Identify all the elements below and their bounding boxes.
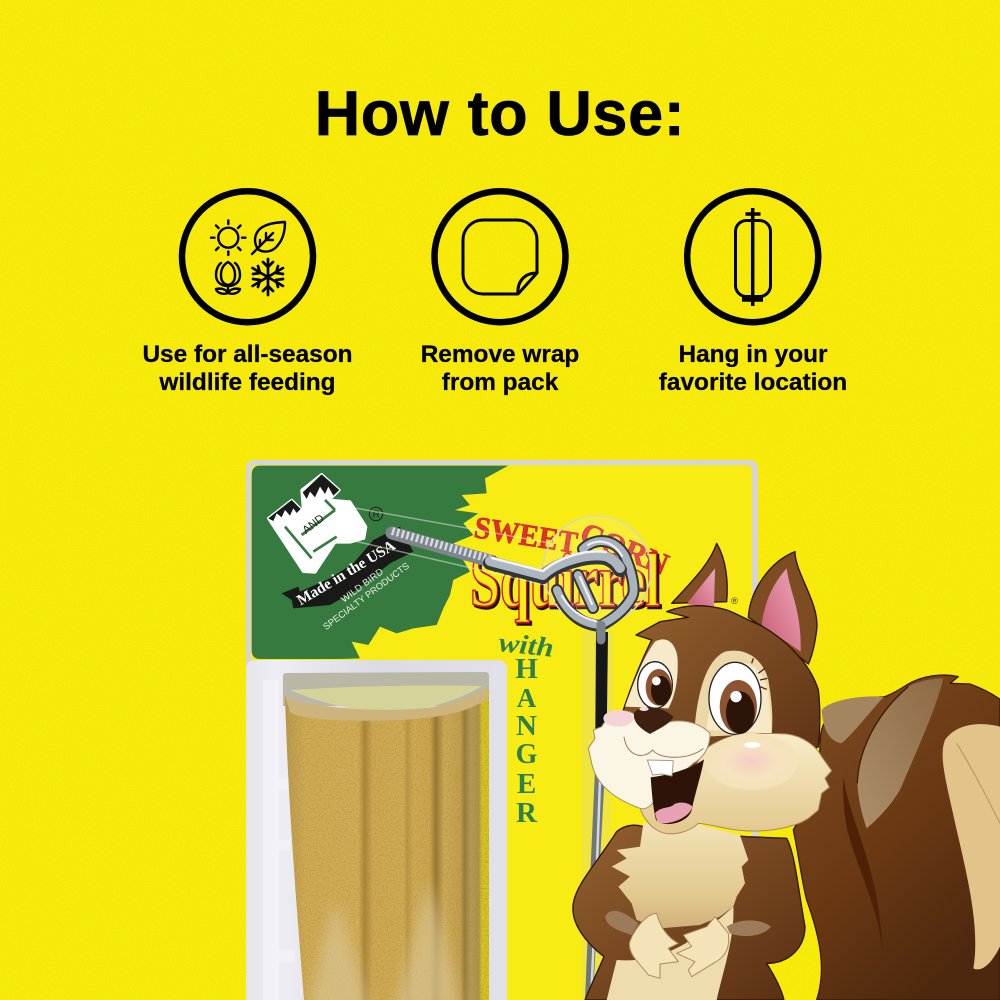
head — [588, 606, 832, 834]
nose — [634, 707, 673, 734]
caption 1: wildlife feeding — [158, 369, 336, 396]
with hanger: with — [497, 627, 555, 663]
step 3: hang — [659, 191, 847, 396]
with hanger: E — [517, 768, 536, 800]
body and arms — [573, 825, 805, 1000]
chest fur — [612, 823, 748, 928]
with hanger: A — [517, 683, 537, 713]
tail — [793, 675, 1000, 1000]
hands — [629, 913, 729, 978]
hanger rod and clear tube — [582, 631, 614, 1000]
wild bird tagline: WILD BIRD — [339, 566, 386, 605]
caption 2: Remove wrap — [421, 341, 579, 368]
green label burst — [252, 466, 508, 659]
mouth — [624, 737, 704, 824]
with hanger: H — [515, 653, 538, 685]
tail highlights — [822, 678, 1000, 969]
registered mark: ® — [731, 596, 738, 606]
suction cup — [543, 516, 651, 624]
corn suet cylinder — [283, 672, 489, 1000]
package backing card — [246, 460, 758, 1000]
squirrel mascot — [573, 543, 1000, 1000]
caption 1: Use for all-season — [142, 341, 353, 368]
icon: hanging feeder — [687, 191, 818, 322]
icon: seasons — [182, 191, 313, 322]
icon: peel sticker — [434, 191, 566, 322]
product name: Squirrel — [472, 541, 662, 625]
tagline: SPECIALTY PRODUCTS — [321, 561, 411, 632]
brand logo: AND — [300, 513, 327, 537]
caption 2: from pack — [442, 369, 559, 396]
clear blister tray — [246, 660, 507, 1000]
muzzle — [588, 711, 710, 809]
step 1: all-season use — [142, 191, 353, 396]
product name: Squirrel — [470, 539, 660, 623]
product name — [470, 509, 674, 625]
made in the USA banner — [282, 527, 413, 609]
with hanger: N — [516, 710, 537, 742]
loop — [490, 541, 634, 640]
with hanger: R — [516, 797, 538, 829]
ears — [672, 543, 817, 664]
clear sleeve over logo — [350, 508, 550, 585]
threaded screw — [392, 531, 490, 561]
metal hook with suction cup — [350, 508, 651, 640]
caption 3: Hang in your — [678, 341, 828, 368]
cheek — [640, 733, 832, 834]
eye patches — [625, 639, 678, 708]
left eye — [638, 662, 672, 708]
brand logo: R — [373, 510, 380, 521]
brand logo — [268, 474, 383, 572]
title: How to Use: — [315, 79, 685, 149]
step 2: remove wrap — [421, 191, 579, 396]
with hanger — [497, 627, 555, 829]
caption 3: favorite location — [659, 369, 847, 396]
product package — [246, 460, 758, 1000]
product name: SWEET — [472, 509, 580, 560]
right eye — [709, 658, 767, 734]
product name: CORN — [575, 515, 674, 582]
made in the USA banner: Made in the USA — [294, 537, 398, 609]
with hanger: G — [516, 739, 538, 770]
